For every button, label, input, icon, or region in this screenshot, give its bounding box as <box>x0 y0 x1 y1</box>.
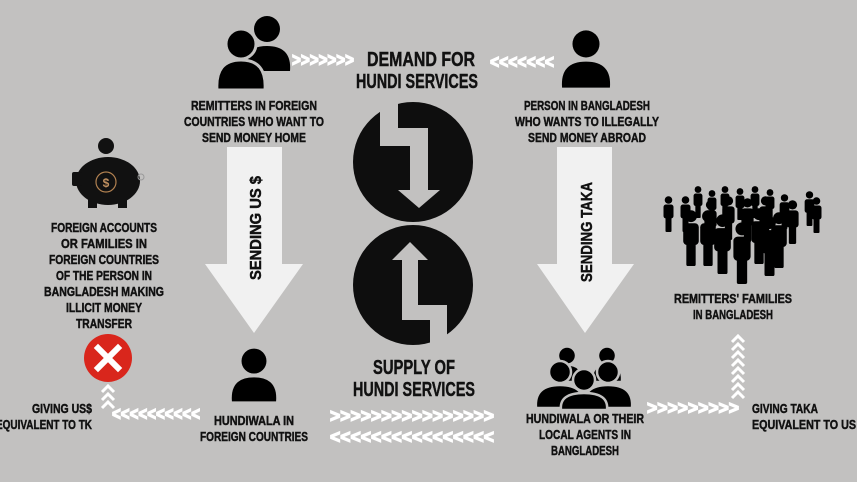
icon: piggy bank: $ <box>103 176 110 190</box>
icon: demand circle with down arrow <box>353 98 473 222</box>
icon: supply circle with up arrow <box>353 225 473 350</box>
text: hundiwala local agents: BANGLADESH <box>551 443 619 458</box>
arrow: chevrons right to demand: >>>>>>> <box>292 50 354 70</box>
arrow: chevrons left-up to x: <<<<<<<<<< <box>112 404 200 424</box>
text: hundiwala in foreign countries: FOREIGN COUNTRIES <box>200 429 308 444</box>
text: hundiwala in foreign countries <box>200 413 308 444</box>
heading: demand for hundi services: DEMAND FOR <box>367 49 475 71</box>
icon: crowd <box>664 186 822 284</box>
arrow: double chevrons: <<<<<<<<<<<<<<<< <box>330 427 494 447</box>
heading: supply of hundi services <box>353 357 475 401</box>
icon: hundiwala foreign <box>232 349 276 401</box>
text: remitters' families: IN BANGLADESH <box>693 307 773 322</box>
text: person in bangladesh: SEND MONEY ABROAD <box>528 130 646 145</box>
text: person in bangladesh: WHO WANTS TO ILLEGALLY <box>515 114 659 129</box>
arrow: sending us $: SENDING US $ <box>248 176 265 280</box>
text: foreign accounts: FOREIGN ACCOUNTS <box>51 220 157 235</box>
icon: remitters pair <box>217 16 290 90</box>
text: remitters' families: REMITTERS' FAMILIES <box>674 291 792 306</box>
text: foreign accounts: BANGLADESH MAKING <box>44 284 164 299</box>
text: hundiwala in foreign countries: HUNDIWALA IN <box>214 413 294 428</box>
text: giving taka <box>752 401 856 432</box>
icon: piggy bank <box>72 138 144 208</box>
text: giving us$: GIVING US$ <box>32 401 93 416</box>
icon: red x <box>84 334 132 382</box>
arrow: double chevrons: >>>>>>>>>>>>>>>> <box>330 406 494 426</box>
text: foreign accounts: ILLICIT MONEY <box>66 300 142 315</box>
arrow: sending taka: SENDING TAKA <box>579 182 596 282</box>
icon: person in bangladesh <box>562 30 610 88</box>
heading: demand for hundi services <box>356 49 478 93</box>
text: hundiwala local agents: LOCAL AGENTS IN <box>539 427 631 442</box>
text: foreign accounts: TRANSFER <box>76 316 132 331</box>
text: person in bangladesh <box>515 98 659 145</box>
arrow: double chevrons <box>330 406 494 447</box>
arrow: chevrons right-up to families: >>>>>>>>> <box>647 398 739 418</box>
text: remitters in foreign countries: REMITTERS IN FOREIGN <box>191 98 317 113</box>
text: hundiwala local agents <box>526 411 644 458</box>
text: hundiwala local agents: HUNDIWALA OR THEIR <box>526 411 644 426</box>
arrow: chevrons left-up to x <box>102 386 200 424</box>
icon: hundiwala group <box>536 348 632 410</box>
heading: supply of hundi services: SUPPLY OF <box>373 357 455 379</box>
text: foreign accounts: OR FAMILIES IN <box>61 236 147 251</box>
heading: supply of hundi services: HUNDI SERVICES <box>353 379 475 401</box>
arrow: sending us $ <box>205 147 303 333</box>
text: remitters in foreign countries: SEND MONEY HOME <box>202 130 306 145</box>
text: foreign accounts <box>44 220 164 331</box>
text: giving us$ <box>0 401 93 432</box>
text: giving taka: GIVING TAKA <box>752 401 818 416</box>
arrow: chevrons left to demand: <<<<<<< <box>490 52 554 72</box>
text: remitters' families <box>674 291 792 322</box>
heading: demand for hundi services: HUNDI SERVICES <box>356 71 478 93</box>
text: remitters in foreign countries <box>184 98 324 145</box>
text: foreign accounts: OF THE PERSON IN <box>56 268 152 283</box>
text: remitters in foreign countries: COUNTRIES WHO WANT TO <box>184 114 324 129</box>
arrow: sending taka <box>537 147 634 333</box>
text: foreign accounts: FOREIGN COUNTRIES <box>49 252 159 267</box>
arrow: chevrons right-up to families <box>647 336 744 418</box>
text: person in bangladesh: PERSON IN BANGLADESH <box>524 98 650 113</box>
